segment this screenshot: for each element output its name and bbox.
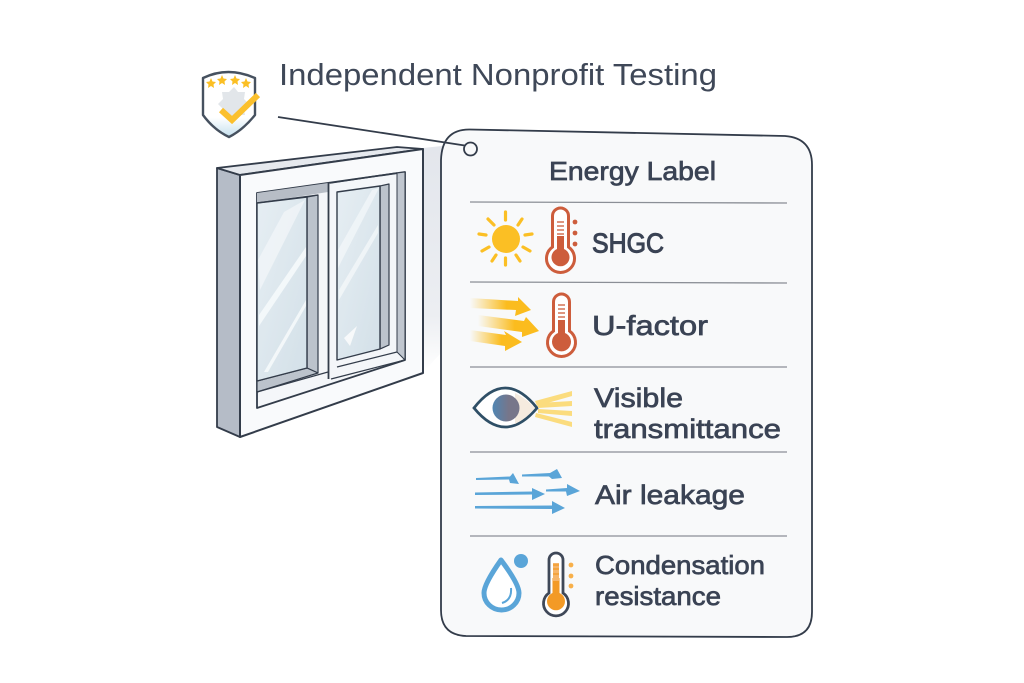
label: U-factor: U-factor (592, 310, 708, 341)
left top reveal (257, 183, 328, 203)
right pane glass (337, 186, 380, 360)
shadow behind window (423, 146, 442, 372)
label: Air leakage: Air leakage (595, 480, 745, 510)
checkmark (221, 95, 258, 120)
left sash strip (307, 195, 318, 373)
center mullion (328, 183, 330, 379)
icon: eye (474, 388, 537, 427)
card outline (441, 129, 812, 637)
icon: shield with stars and check (203, 72, 258, 137)
icon: water drop (484, 554, 528, 610)
window illustration (217, 147, 423, 437)
row: Condensation resistance: resistance (595, 581, 721, 611)
panel: energy label (278, 117, 812, 637)
panel heading: Energy Label (549, 156, 716, 186)
row: SHGC (479, 208, 664, 272)
stars (206, 75, 251, 88)
row: Air leakage (475, 469, 745, 514)
icon: heat arrows (470, 297, 539, 351)
icon: thermometer (543, 553, 573, 616)
callout leader line (278, 117, 477, 156)
row: Visible transmittance: transmittance (594, 414, 781, 444)
window opening (257, 172, 405, 408)
row: Visible transmittance (474, 383, 781, 444)
icon: light rays (535, 391, 572, 427)
window frame top (217, 147, 423, 175)
icon: thermometer (548, 294, 576, 356)
left pane glass (257, 197, 307, 381)
left bottom strip (257, 368, 318, 392)
label: SHGC: SHGC (592, 228, 664, 258)
label: Visible transmittance: Visible (594, 383, 683, 413)
icon: thermometer (546, 208, 577, 272)
title: Independent Nonprofit Testing (279, 57, 717, 92)
label: Condensation resistance: Condensation (595, 550, 765, 580)
row: Condensation resistance (484, 550, 765, 616)
window frame face (240, 149, 423, 437)
right sash strip (380, 184, 389, 349)
row: U-factor (470, 294, 708, 356)
icon: sun (479, 212, 532, 265)
seal (218, 87, 249, 120)
window frame side (217, 168, 240, 437)
opening reveal (397, 172, 405, 360)
icon: air arrows (475, 469, 580, 514)
